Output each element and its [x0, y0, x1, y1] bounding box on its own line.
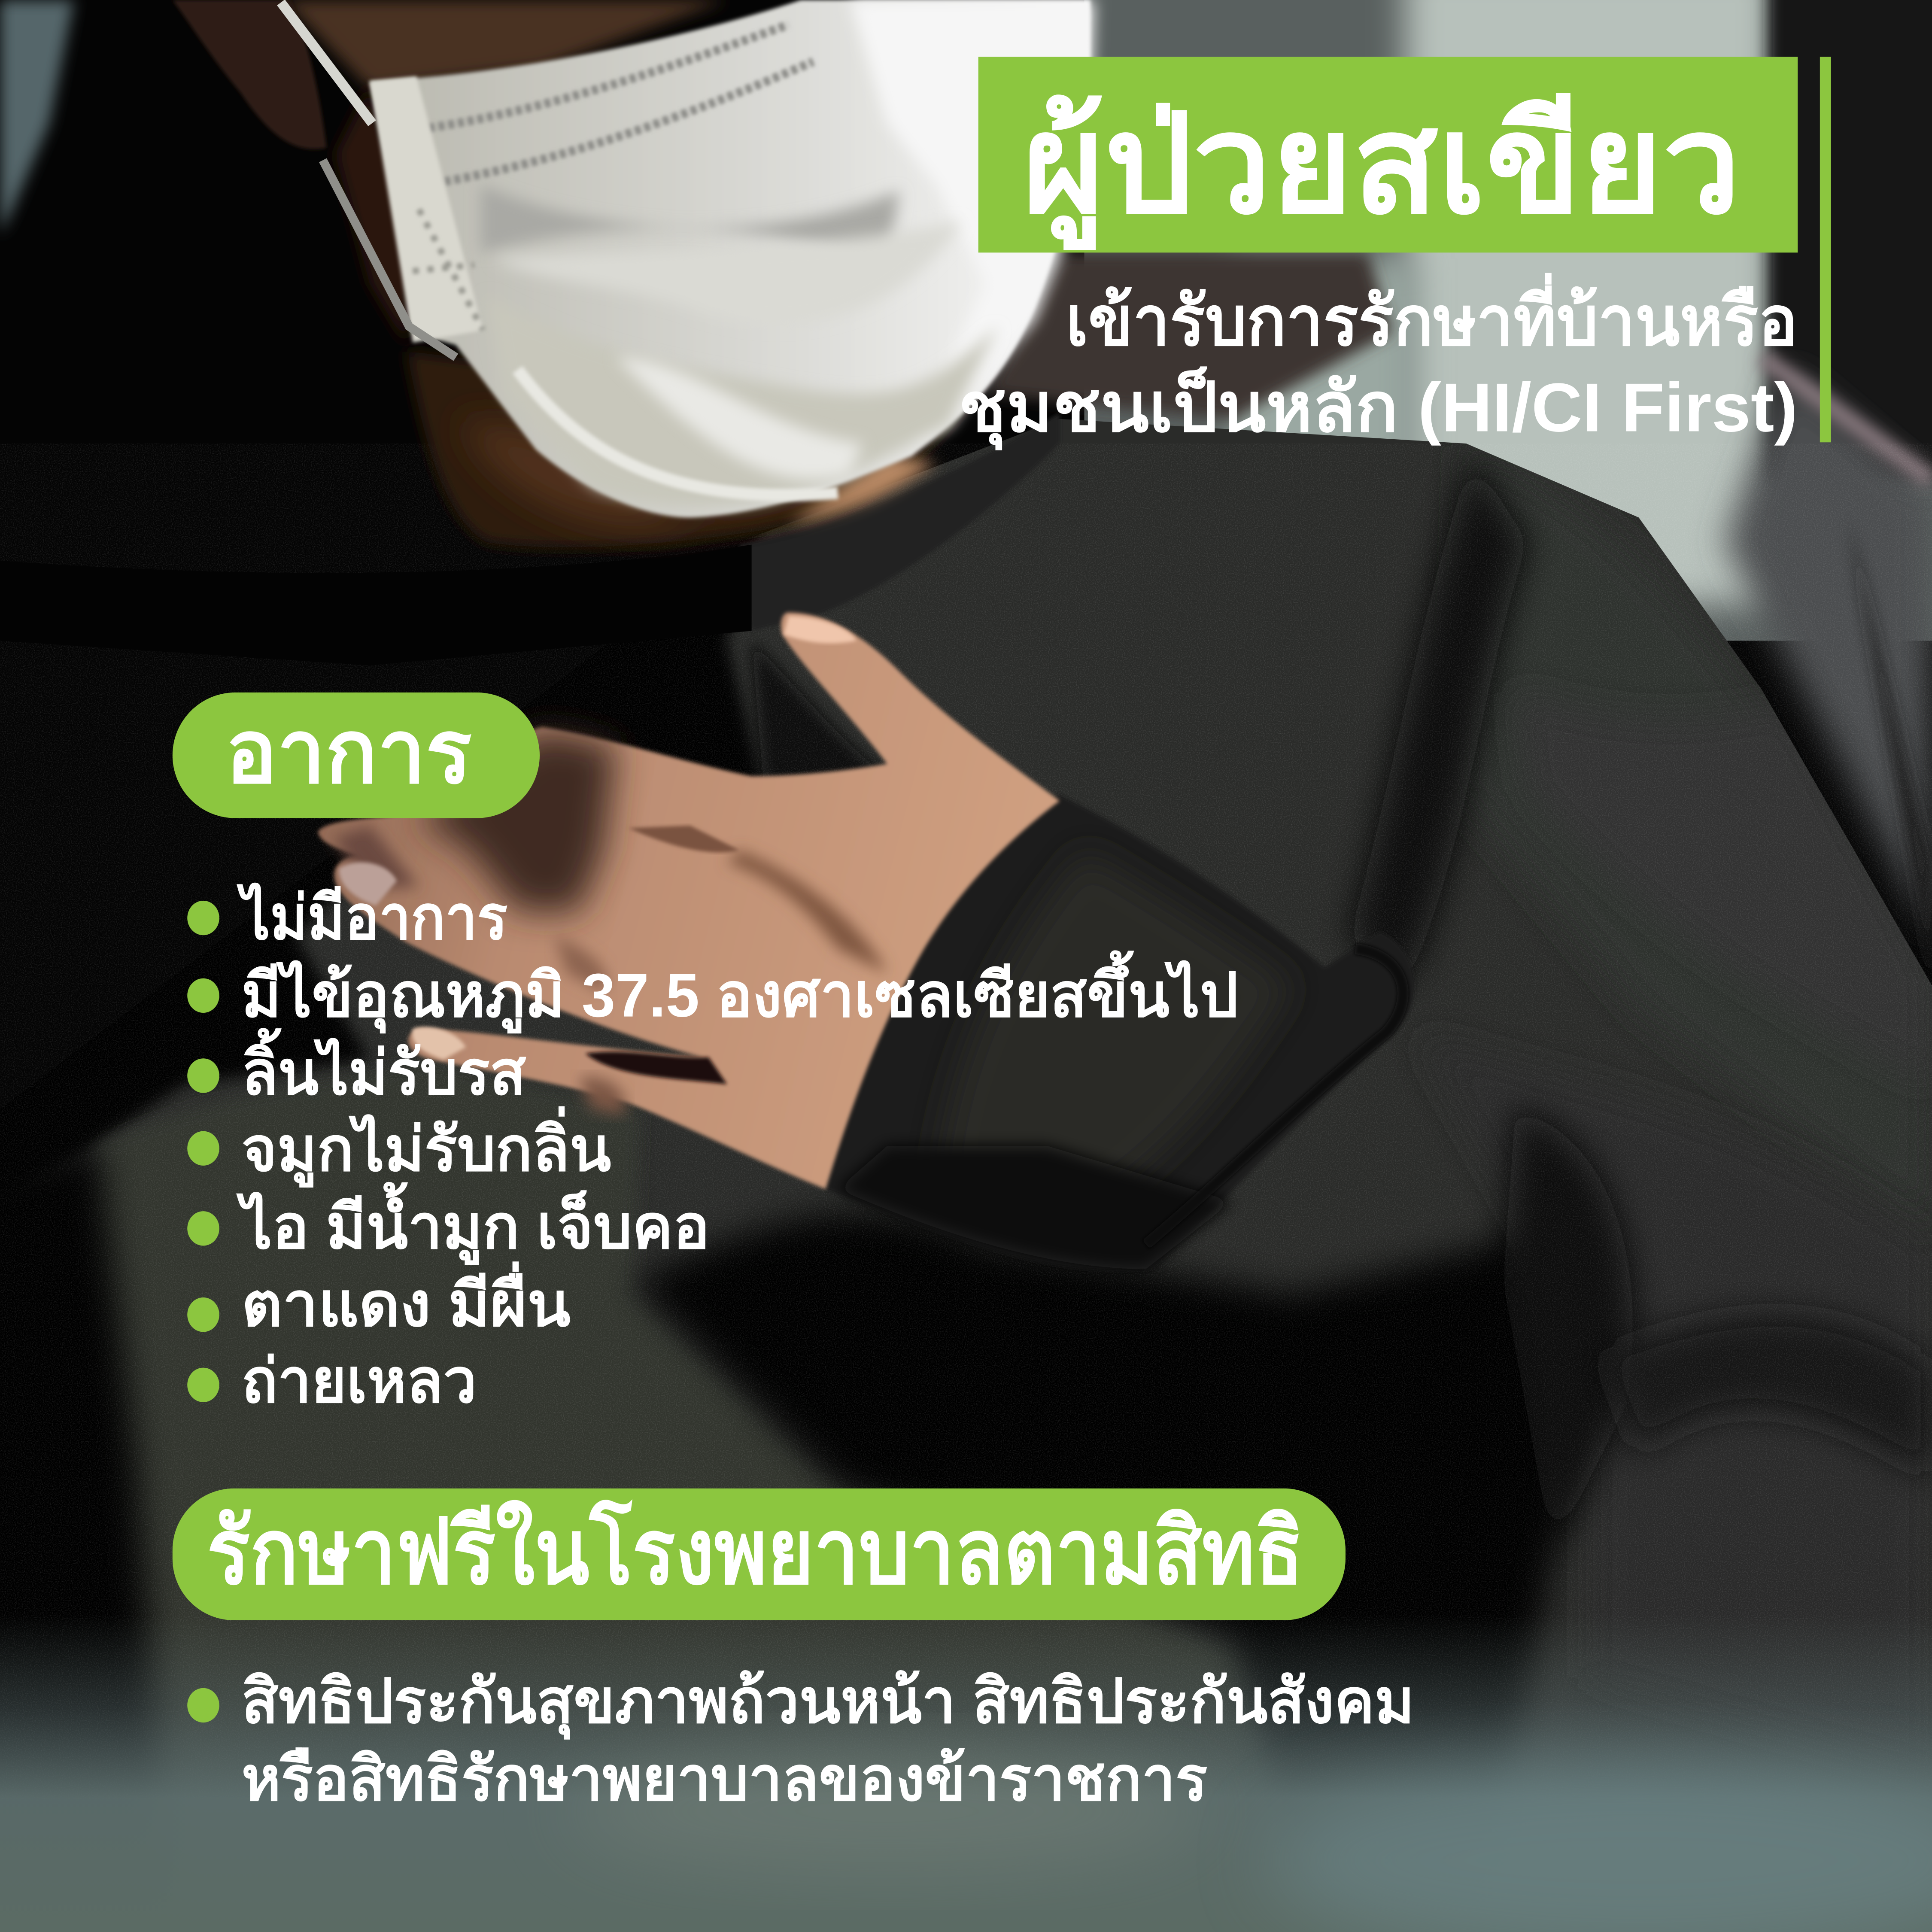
- lower left lit sweater: [0, 1060, 1306, 1932]
- symptom list: [187, 882, 1238, 1416]
- subtitle: เข้ารับการรักษาที่บ้านหรือ: [1066, 273, 1798, 360]
- hair behind neck: [986, 252, 1392, 419]
- left dark edge: [0, 1146, 173, 1932]
- neck and face skin: [283, 0, 998, 547]
- subtitle: [959, 273, 1798, 450]
- entitlement text: สิทธิประกันสุขภาพถ้วนหน้า สิทธิประกันสังคม: [242, 1667, 1415, 1740]
- symptom 7: ถ่ายเหลว: [242, 1347, 477, 1416]
- symptom 1: ไม่มีอาการ: [237, 882, 507, 952]
- ear: [173, 0, 327, 149]
- symptom 3: ลิ้นไม่รับรส: [242, 1027, 526, 1107]
- subtitle: ชุมชนเป็นหลัก (HI/CI First): [959, 366, 1798, 450]
- shadow between chest and sleeve: [1349, 456, 1528, 986]
- heading pill: symptoms: อาการ: [225, 702, 472, 801]
- symptom 2: มีไข้อุณหภูมิ 37.5 องศาเซลเซียสขึ้นไป: [242, 950, 1238, 1034]
- heading pill: free treatment: [173, 1488, 1346, 1620]
- heading pill: symptoms: [173, 693, 540, 818]
- accent bar: [1820, 57, 1831, 442]
- sleeve crease shadow: [1602, 1315, 1932, 1479]
- heading pill: free treatment: รักษาฟรีในโรงพยาบาลตามสิทธิ: [207, 1499, 1303, 1603]
- hand: [318, 612, 1060, 1189]
- face mask: [281, 0, 1094, 517]
- symptom 6: ตาแดง มีผื่น: [242, 1261, 571, 1339]
- blurred window backdrop: [1084, 0, 1932, 986]
- collar: [739, 413, 1060, 631]
- bottom fade: [0, 1614, 1932, 1932]
- title banner: ผู้ป่วยสเขียว: [1023, 88, 1741, 251]
- fabric grain: [0, 444, 1932, 1799]
- entitlement text: หรือสิทธิรักษาพยาบาลของข้าราชการ: [242, 1745, 1208, 1814]
- blurred left edge window: [0, 0, 74, 234]
- central deep shadow: [635, 1213, 1589, 1932]
- sleeve cuff: [826, 795, 1415, 1271]
- entitlement text: [187, 1667, 1415, 1814]
- sweater: [80, 419, 1932, 1778]
- chest shadow: [0, 517, 764, 1232]
- symptom 5: ไอ มีน้ำมูก เจ็บคอ: [236, 1182, 710, 1265]
- symptom 4: จมูกไม่รับกลิ่น: [242, 1106, 611, 1188]
- lit sleeve: [1417, 1035, 1932, 1774]
- title banner: [978, 57, 1798, 252]
